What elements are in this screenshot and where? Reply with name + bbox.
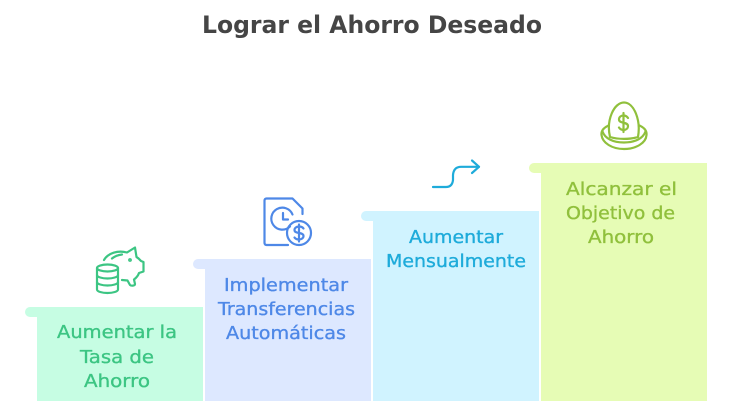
step 1 block: [25, 307, 203, 401]
icon: egg in nest: [601, 102, 647, 149]
title: Lograr el Ahorro Deseado: [202, 11, 542, 39]
step 3 label: [386, 227, 526, 272]
step 4 label: Objetivo de: [566, 203, 675, 224]
icon: piggy bank and coins: [97, 248, 144, 293]
step 2 block: [193, 259, 371, 401]
step 4 label: Ahorro: [588, 227, 654, 248]
step 1 label: Ahorro: [84, 371, 150, 392]
step 1 label: Tasa de: [79, 347, 154, 368]
step 1 label: Aumentar la: [57, 322, 177, 343]
step 1 label: [57, 322, 177, 392]
step 2 label: Implementar: [224, 275, 349, 296]
icon: document with clock and dollar: [264, 198, 311, 245]
panel: step 3: [361, 160, 539, 401]
step 4 label: Alcanzar el: [566, 179, 677, 200]
step 3 label: Aumentar: [409, 227, 504, 248]
step 3 label: Mensualmente: [386, 251, 526, 272]
icon: stepped arrow: [433, 160, 479, 187]
step 3 block: [361, 211, 539, 401]
step 4 block: [529, 163, 707, 401]
panel: step 4: [529, 102, 707, 401]
panel: step 1: [25, 248, 203, 401]
step 2 label: [217, 275, 355, 344]
step 2 label: Automáticas: [226, 323, 346, 344]
step 2 label: Transferencias: [217, 299, 355, 320]
step 4 label: [566, 179, 677, 248]
panel: step 2: [193, 198, 371, 401]
